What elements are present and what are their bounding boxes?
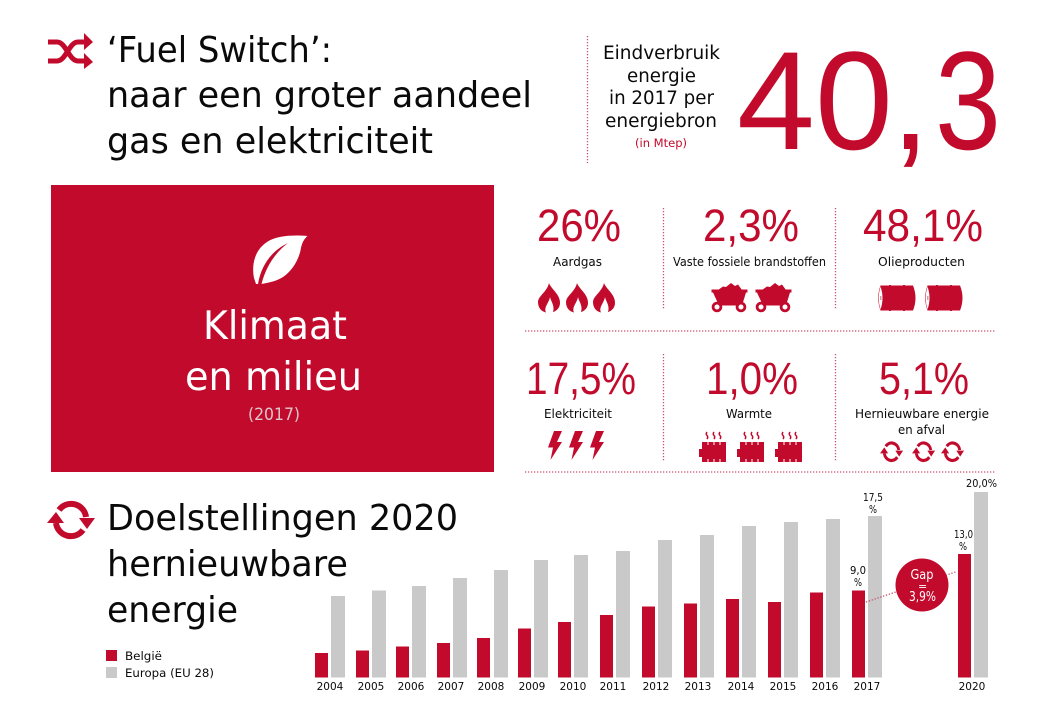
icon: shuffle arrows <box>48 33 93 69</box>
title <box>107 30 532 162</box>
value labels: 20,0% <box>966 477 997 490</box>
icon: recycle arrows <box>880 443 964 460</box>
bar chart: renewable share <box>315 477 997 693</box>
year axis labels: 2010 <box>560 681 586 693</box>
stat: Warmte: Warmte <box>726 407 772 421</box>
panel heading <box>185 304 362 400</box>
value labels: 9,0 <box>850 564 866 577</box>
panel year: (2017) <box>248 405 300 424</box>
stat: Hernieuwbare energie en afval: en afval <box>898 423 945 437</box>
year axis labels: 2016 <box>812 681 839 693</box>
stat: Hernieuwbare energie en afval: Hernieuwbare energie <box>855 407 989 421</box>
bars: België <box>315 554 971 678</box>
bars: Europa <box>331 492 988 678</box>
year axis labels: 2013 <box>685 681 711 693</box>
stat: Aardgas <box>537 200 621 312</box>
icon: leaf <box>253 236 308 284</box>
text block: consumption caption: Eindverbruik <box>603 43 720 64</box>
text block: consumption caption: in 2017 per <box>609 88 714 109</box>
heading: Doelstellingen 2020: Doelstellingen 2020 <box>107 498 458 539</box>
value labels: % <box>869 503 877 516</box>
value labels: % <box>959 540 967 553</box>
stat: Warmte: 1,0% <box>706 353 798 404</box>
text block: consumption caption: energie <box>627 66 696 87</box>
stat: Warmte <box>699 353 802 462</box>
text block: consumption caption: energiebron <box>605 111 717 132</box>
year axis labels: 2005 <box>358 681 384 693</box>
icon: flames <box>538 283 615 312</box>
text block: consumption caption: (in Mtep) <box>635 136 687 150</box>
heading: Doelstellingen 2020 <box>107 498 458 631</box>
value labels: 17,5 <box>863 491 883 504</box>
legend: Europa (EU 28) <box>125 666 214 680</box>
year axis labels: 2012 <box>643 681 669 693</box>
title: gas en elektriciteit <box>107 121 433 162</box>
text block: consumption caption <box>603 43 720 150</box>
stat: Hernieuwbare energie en afval <box>855 353 989 460</box>
panel heading: Klimaat <box>203 304 347 349</box>
stat: Aardgas: Aardgas <box>553 255 602 269</box>
icon: lightning bolts <box>548 431 604 460</box>
stat grid dividers <box>525 208 995 472</box>
stat: Vaste fossiele brandstoffen: Vaste fossiele brandstoffen <box>673 255 826 269</box>
heading: Doelstellingen 2020: hernieuwbare <box>107 544 348 585</box>
year axis labels: 2009 <box>519 681 545 693</box>
gap connector <box>866 572 957 602</box>
year axis labels: 2011 <box>600 681 626 693</box>
callout: gap: = <box>918 580 927 593</box>
year axis labels: 2008 <box>478 681 504 693</box>
icon: renewable cycle <box>47 504 95 536</box>
stat: Hernieuwbare energie en afval: 5,1% <box>879 353 969 404</box>
year axis labels: 2015 <box>770 681 796 693</box>
legend <box>106 649 214 680</box>
year axis labels: 2007 <box>438 681 464 693</box>
icon: radiators <box>699 432 802 462</box>
icon: oil barrels <box>878 285 962 311</box>
year axis labels: 2017 <box>854 681 880 693</box>
callout: gap <box>896 558 948 612</box>
stat: Olieproducten: 48,1% <box>863 200 983 251</box>
stat: Elektriciteit <box>526 353 636 460</box>
stat: Elektriciteit: 17,5% <box>526 353 636 404</box>
big number: 3 <box>935 22 1001 179</box>
value labels: % <box>854 576 862 589</box>
stat: Aardgas: 26% <box>537 200 621 251</box>
panel: Klimaat en milieu <box>51 185 494 472</box>
year axis labels: 2006 <box>398 681 425 693</box>
stat: Vaste fossiele brandstoffen: 2,3% <box>703 200 799 251</box>
callout: gap: Gap <box>910 567 934 583</box>
title: naar een groter aandeel <box>107 75 532 116</box>
value labels <box>850 477 997 589</box>
year axis labels: 2014 <box>728 681 755 693</box>
year axis labels <box>317 681 985 693</box>
icon: coal carts <box>712 283 792 311</box>
title: ‘Fuel Switch’: <box>107 30 332 71</box>
total consumption divider <box>586 36 588 163</box>
heading: Doelstellingen 2020: energie <box>107 590 238 631</box>
value labels: 13,0 <box>954 528 973 541</box>
stat: Olieproducten: Olieproducten <box>878 255 965 269</box>
year axis labels: 2004 <box>317 681 344 693</box>
stat: Elektriciteit: Elektriciteit <box>544 407 612 421</box>
stat: Olieproducten <box>863 200 983 311</box>
big number: 40, <box>737 22 930 179</box>
callout: gap: 3,9% <box>909 589 936 605</box>
year axis labels: 2020 <box>959 681 985 693</box>
stat: Vaste fossiele brandstoffen <box>673 200 826 311</box>
panel heading: en milieu <box>185 355 362 400</box>
legend: België <box>125 649 162 663</box>
